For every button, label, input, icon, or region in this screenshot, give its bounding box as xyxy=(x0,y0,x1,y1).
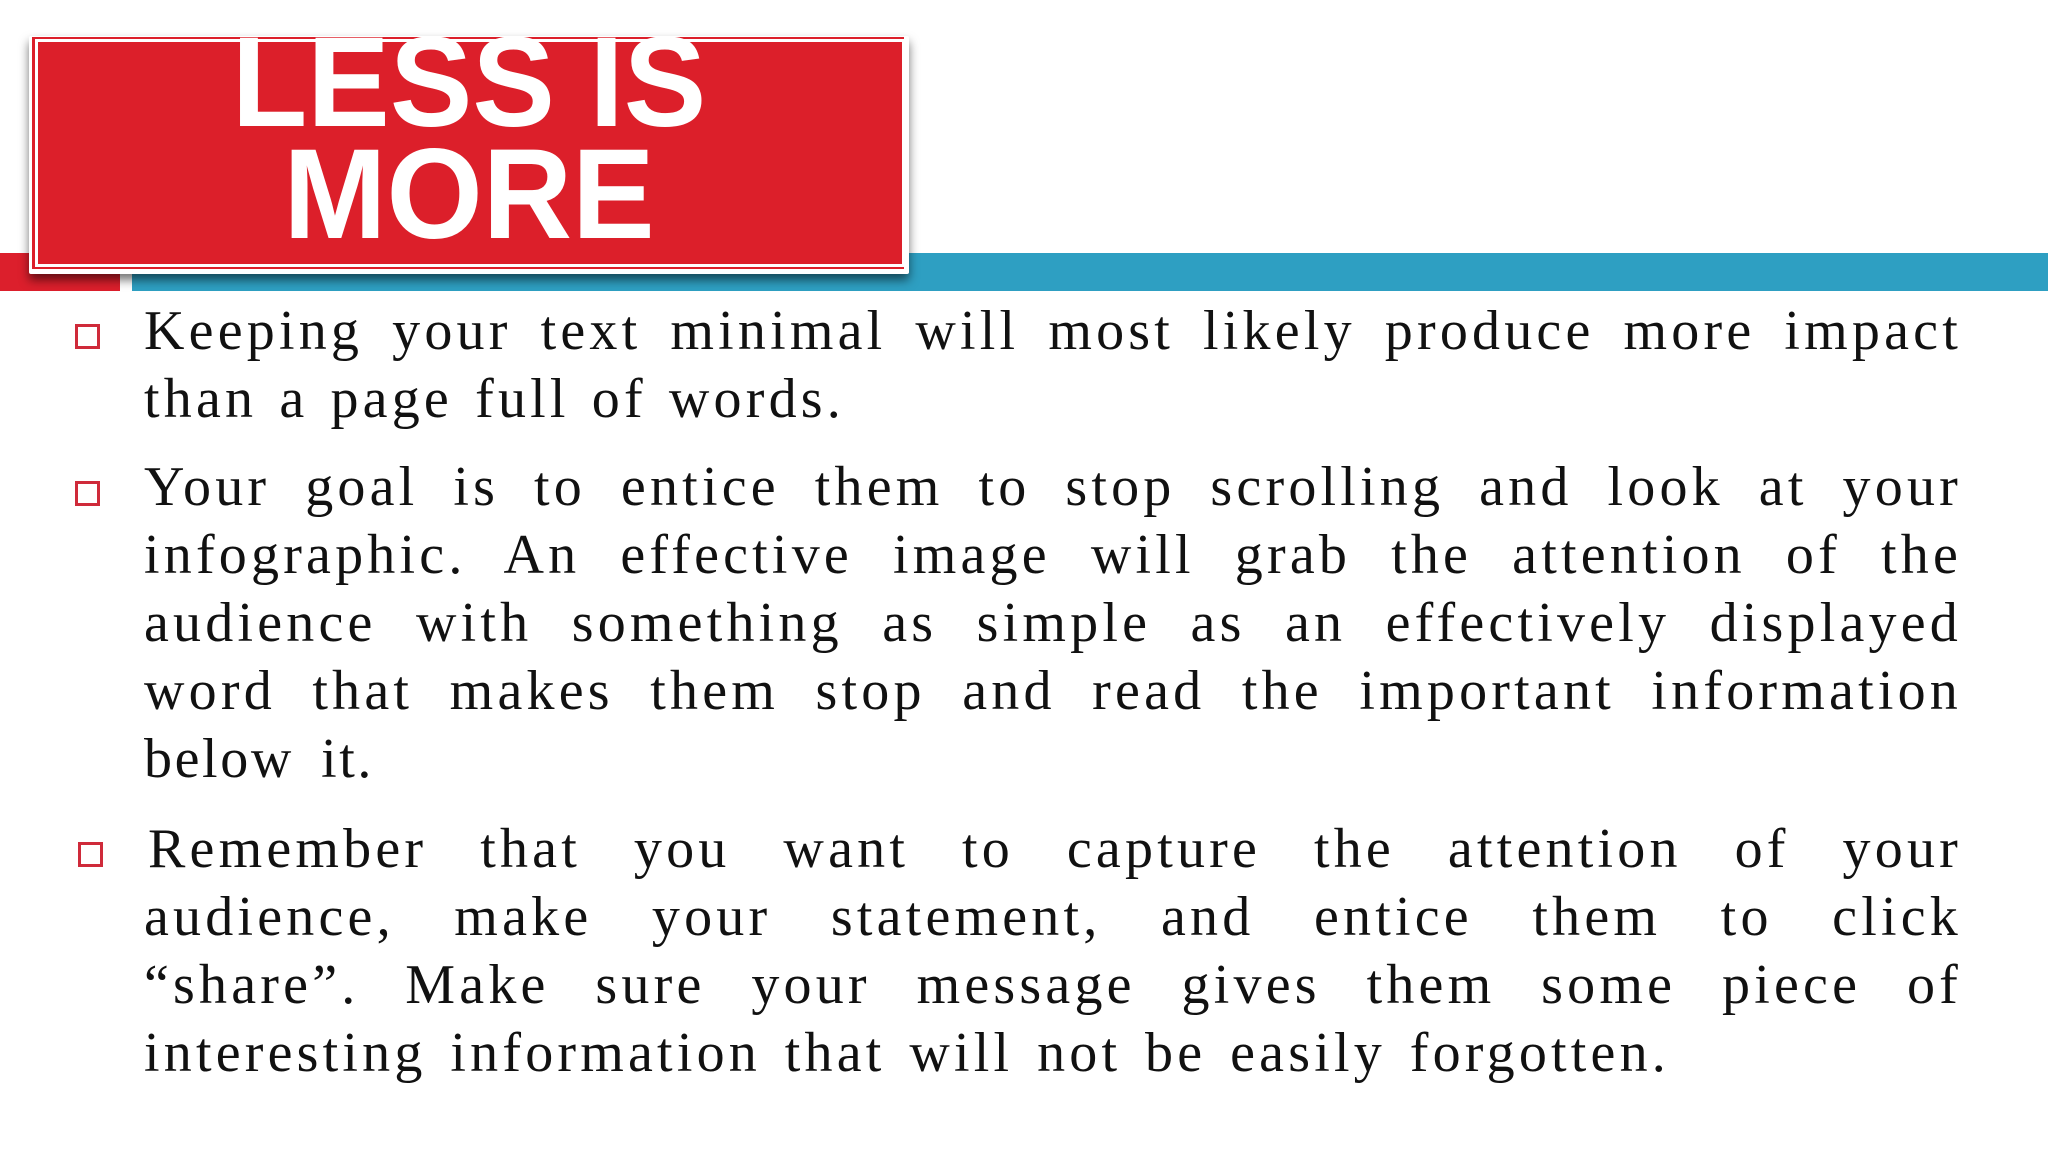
text xyxy=(144,818,1962,1084)
bullet point 3: “share”. Make sure your message gives them some piece of xyxy=(144,954,1962,1016)
text xyxy=(144,300,1962,430)
bullet point 1: than a page full of words. xyxy=(144,368,845,430)
bullet icon xyxy=(75,481,100,506)
bullet icon xyxy=(75,324,100,349)
title banner xyxy=(29,36,909,274)
bullet point 3 xyxy=(78,818,1962,1084)
banner: inner white frame xyxy=(35,39,905,267)
title line 1: LESS IS xyxy=(232,11,706,154)
bullet point 2 xyxy=(75,456,1962,790)
bullet point 2: infographic. An effective image will grab the attention of the xyxy=(144,524,1962,586)
bullet point 2: audience with something as simple as an effectively displayed xyxy=(144,592,1962,654)
header band xyxy=(0,253,2048,291)
bullet point 3: Remember that you want to capture the attention of your xyxy=(148,818,1962,880)
banner: red fill xyxy=(32,37,904,269)
title line 2: MORE xyxy=(283,123,655,266)
title text xyxy=(232,11,706,266)
bullet point 3: audience, make your statement, and entice them to click xyxy=(144,886,1962,948)
bullet point 2: word that makes them stop and read the important information xyxy=(144,660,1962,722)
bullet point 1: Keeping your text minimal will most likely produce more impact xyxy=(144,300,1962,362)
bullet point 2: Your goal is to entice them to stop scrolling and look at your xyxy=(144,456,1962,518)
text xyxy=(144,456,1962,790)
band: red segment xyxy=(0,253,120,291)
bullet point 3: interesting information that will not be easily forgotten. xyxy=(144,1022,1670,1084)
band: teal segment xyxy=(132,253,2048,291)
bullet icon xyxy=(78,842,103,867)
bullet point 2: below it. xyxy=(144,728,374,790)
bullet point 1 xyxy=(75,300,1962,430)
